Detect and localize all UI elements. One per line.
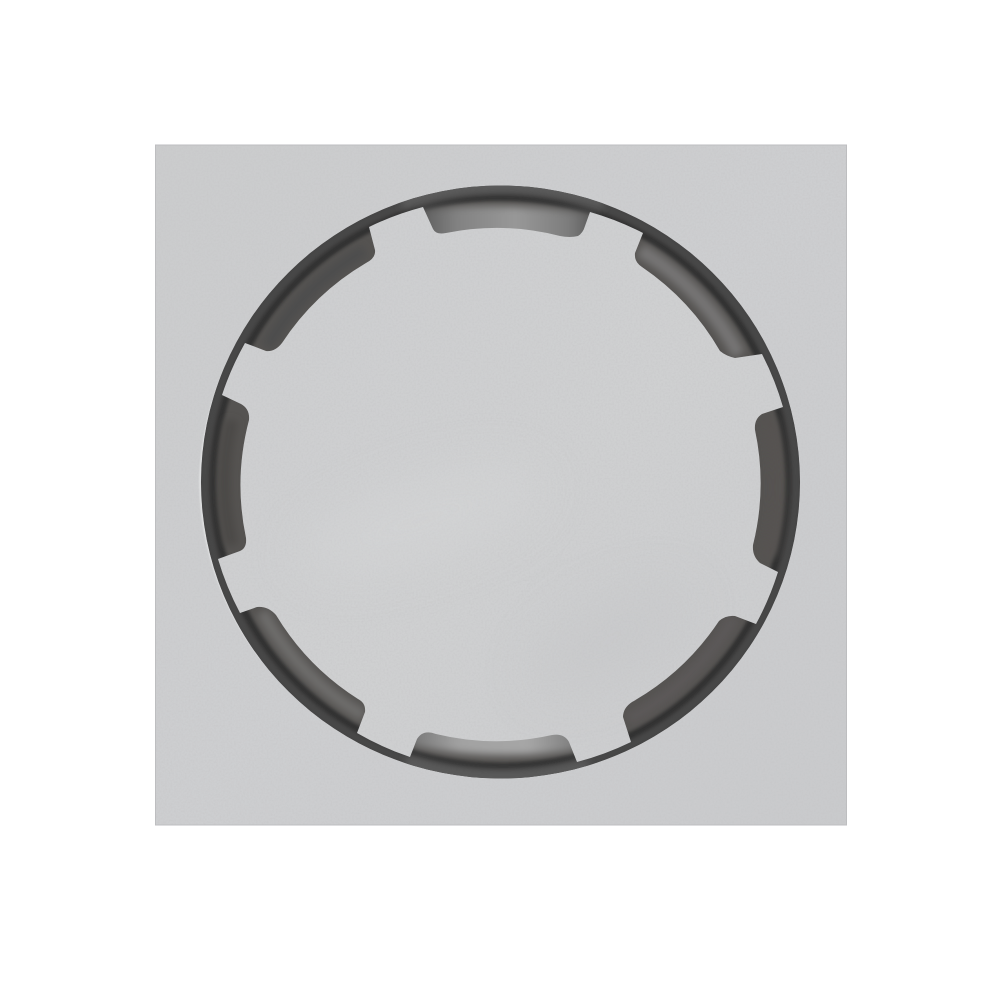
lower left slot band: [262, 612, 364, 716]
floor drain illustration: [155, 144, 847, 826]
left slot band: [224, 420, 232, 545]
top outer lip: [400, 182, 605, 200]
upper left slot band: [267, 250, 365, 347]
right slot band: [769, 420, 778, 555]
concentric channel shading: [204, 189, 796, 775]
lower right slot band: [628, 617, 734, 720]
dark circular channel: [201, 182, 800, 781]
plate highlight on left of opening: [200, 340, 262, 660]
bottom outer lip: [405, 764, 590, 781]
lit area: bottom slot: [414, 732, 574, 760]
lit area: top slot: [423, 201, 596, 237]
lighter bands in angled slots: [224, 182, 778, 781]
disc surface mottling: [284, 442, 705, 715]
slotted centre disc: [218, 207, 783, 762]
square cover plate: [156, 145, 846, 825]
upper right slot band: [640, 250, 739, 355]
